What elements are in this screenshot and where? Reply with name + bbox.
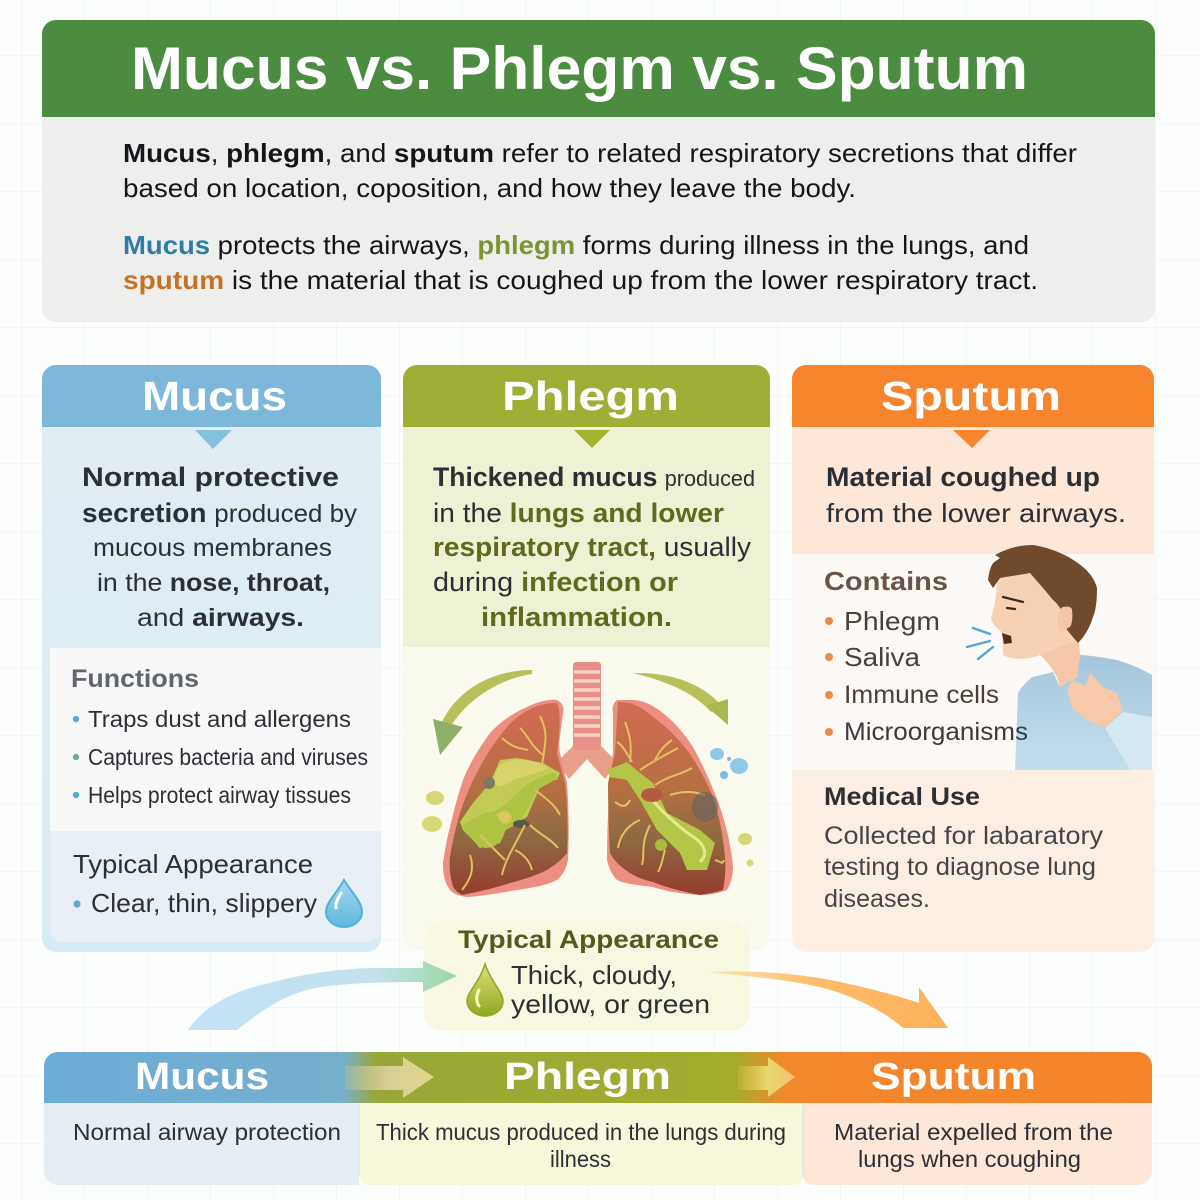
curved arrow left (433, 670, 532, 755)
functions list: Traps dust and allergens (88, 706, 351, 732)
icon: yellow-green drop (467, 964, 503, 1016)
arrow: mucus to phlegm (188, 961, 457, 1030)
typical appearance: mucus (73, 849, 362, 927)
panel: mucus summary (44, 1103, 359, 1185)
ear (1057, 607, 1072, 632)
functions list: Functions (71, 665, 199, 693)
droplets (422, 748, 754, 866)
mouth (1002, 633, 1012, 644)
left lung (443, 700, 569, 897)
summary text: Normal airway protection (73, 1119, 341, 1145)
hair (988, 545, 1097, 643)
typical appearance: mucus: Clear, thin, slippery (91, 888, 317, 918)
typical appearance: mucus: Typical Appearance (73, 849, 313, 879)
summary text: lungs when coughing (858, 1146, 1081, 1172)
medical use: Medical Use (824, 783, 980, 811)
phlegm description: inflammation. (481, 602, 672, 632)
icon: water drop (326, 880, 362, 927)
mucus description: Normal protective (82, 462, 339, 492)
intro text (123, 138, 1077, 295)
chevron arrow: mucus to phlegm (345, 1057, 434, 1098)
functions list: Helps protect airway tissues (88, 782, 351, 808)
intro text: based on location, coposition, and how they leave the body. (123, 173, 856, 203)
panel: sputum (792, 365, 1154, 952)
chevron arrow: phlegm to sputum (738, 1057, 795, 1097)
intro text: Mucus protects the airways, phlegm forms during illness in the lungs, and (123, 230, 1029, 260)
bar labels: Mucus (135, 1056, 269, 1098)
contains list: Saliva (844, 642, 921, 672)
neck (1035, 625, 1080, 687)
phlegm description: in the lungs and lower (433, 498, 725, 528)
phlegm description: respiratory tract, usually (433, 532, 752, 562)
sputum description: from the lower airways. (826, 498, 1126, 528)
bar labels: Sputum (871, 1056, 1036, 1098)
heading: phlegm: Phlegm (502, 373, 679, 419)
panel: sputum summary (803, 1103, 1152, 1185)
panel: phlegm (403, 365, 770, 950)
heading: mucus: Mucus (142, 373, 287, 419)
curved arrow right (633, 673, 728, 725)
sleeve (1105, 712, 1152, 770)
callout: phlegm typical appearance (424, 921, 749, 1031)
phlegm description (433, 462, 755, 632)
eye and brow (1003, 597, 1023, 609)
contains list: Contains (824, 566, 948, 596)
heading: sputum: Sputum (881, 373, 1061, 419)
mucus description: in the nose, throat, (97, 569, 330, 597)
panel: mucus (42, 365, 381, 952)
functions list (71, 665, 368, 808)
summary text: Thick mucus produced in the lungs during (376, 1119, 786, 1145)
mucus description: and airways. (137, 604, 304, 632)
bar labels: Phlegm (504, 1056, 671, 1098)
summary text: illness (550, 1146, 611, 1172)
intro text: sputum is the material that is coughed up from the lower respiratory tract. (123, 265, 1038, 295)
medical use (824, 783, 1104, 913)
right lung (607, 700, 733, 895)
sputum description (826, 462, 1126, 528)
medical use: Collected for labaratory (824, 822, 1104, 850)
illustration: lungs (422, 662, 754, 897)
functions list: Captures bacteria and viruses (88, 744, 368, 770)
phlegm description: Thickened mucus produced (433, 462, 755, 492)
mucus description (82, 462, 358, 632)
mucus description: mucous membranes (93, 534, 332, 562)
title: Mucus vs. Phlegm vs. Sputum (131, 35, 1028, 102)
shirt (1015, 655, 1152, 770)
medical use: diseases. (824, 885, 930, 913)
callout: phlegm typical appearance: Typical Appearance (458, 926, 719, 954)
hand (1067, 673, 1123, 728)
contains list (824, 566, 1028, 746)
summary bar (44, 1052, 1152, 1185)
intro text: Mucus, phlegm, and sputum refer to related respiratory secretions that differ (123, 138, 1077, 168)
bar labels (135, 1056, 1036, 1098)
medical use: testing to diagnose lung (824, 853, 1096, 881)
contains list: Microorganisms (844, 718, 1028, 746)
summary text (73, 1119, 1113, 1172)
face (991, 570, 1078, 659)
cough lines (967, 628, 993, 659)
mucus description: secretion produced by (82, 498, 358, 528)
sputum description: Material coughed up (826, 462, 1100, 492)
illustration: coughing person (967, 545, 1152, 770)
contains list: Immune cells (844, 681, 999, 709)
arrow: phlegm to sputum (706, 971, 948, 1028)
panel: phlegm summary (359, 1103, 803, 1185)
contains list: Phlegm (844, 606, 940, 636)
callout: phlegm typical appearance: yellow, or green (511, 989, 710, 1019)
trachea (573, 662, 601, 750)
callout: phlegm typical appearance: Thick, cloudy, (511, 960, 677, 990)
bronchi (557, 746, 617, 779)
phlegm description: during infection or (433, 567, 679, 597)
header panel (42, 20, 1155, 322)
summary text: Material expelled from the (834, 1119, 1113, 1145)
